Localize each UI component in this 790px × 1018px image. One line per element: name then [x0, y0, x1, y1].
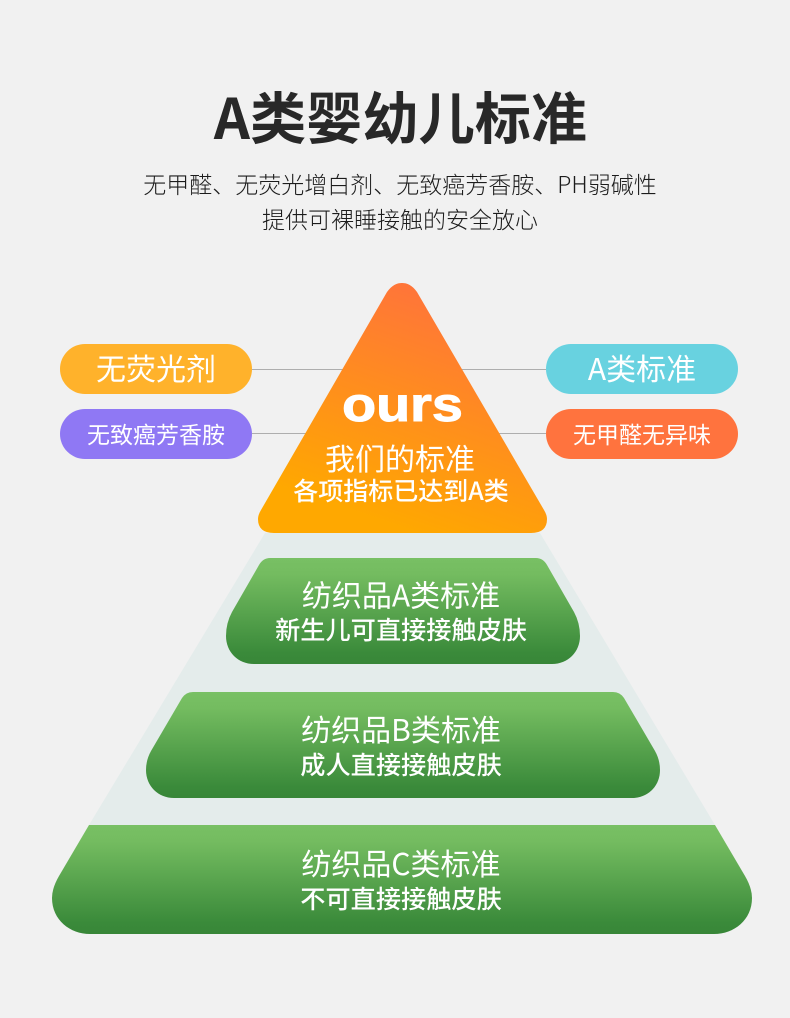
our standard heading: 我们的标准: [325, 435, 475, 479]
panel: class C tier: 纺织品C类标准: [301, 840, 501, 884]
panel: class C tier: 不可直接接触皮肤: [300, 880, 502, 916]
subtitle: [143, 166, 657, 235]
pill: no formaldehyde no odor: 无甲醛无异味: [573, 416, 711, 450]
pill: no fluorescent agent: [60, 344, 252, 394]
pill: class A standard: A类标准: [588, 345, 696, 389]
pill: no formaldehyde no odor: [546, 409, 738, 459]
pale pyramid background: [89, 533, 715, 825]
panel: class B tier: 纺织品B类标准: [301, 706, 501, 750]
subtitle: 提供可裸睡接触的安全放心: [262, 201, 538, 235]
connector lines: [252, 370, 546, 434]
panel: class A tier: 新生儿可直接接触皮肤: [275, 611, 527, 647]
panel: class C tier: [52, 825, 752, 934]
pill: no fluorescent agent: 无荧光剂: [96, 345, 216, 389]
ours logo: ours: [342, 379, 463, 432]
panel: class B tier: 成人直接接触皮肤: [300, 746, 502, 782]
panel: ours tier: [258, 283, 547, 533]
title: A类婴幼儿标准: [213, 75, 587, 156]
panel: class A tier: 纺织品A类标准: [302, 572, 500, 616]
subtitle: 无甲醛、无荧光增白剂、无致癌芳香胺、PH弱碱性: [143, 166, 657, 200]
pill: no carcinogenic amines: 无致癌芳香胺: [87, 416, 225, 450]
panel: class A tier: [226, 558, 580, 664]
pill: no carcinogenic amines: [60, 409, 252, 459]
our standard note: 各项指标已达到A类: [293, 472, 509, 508]
top orange triangle: [258, 283, 547, 533]
pill: class A standard: [546, 344, 738, 394]
panel: class B tier: [146, 692, 660, 798]
